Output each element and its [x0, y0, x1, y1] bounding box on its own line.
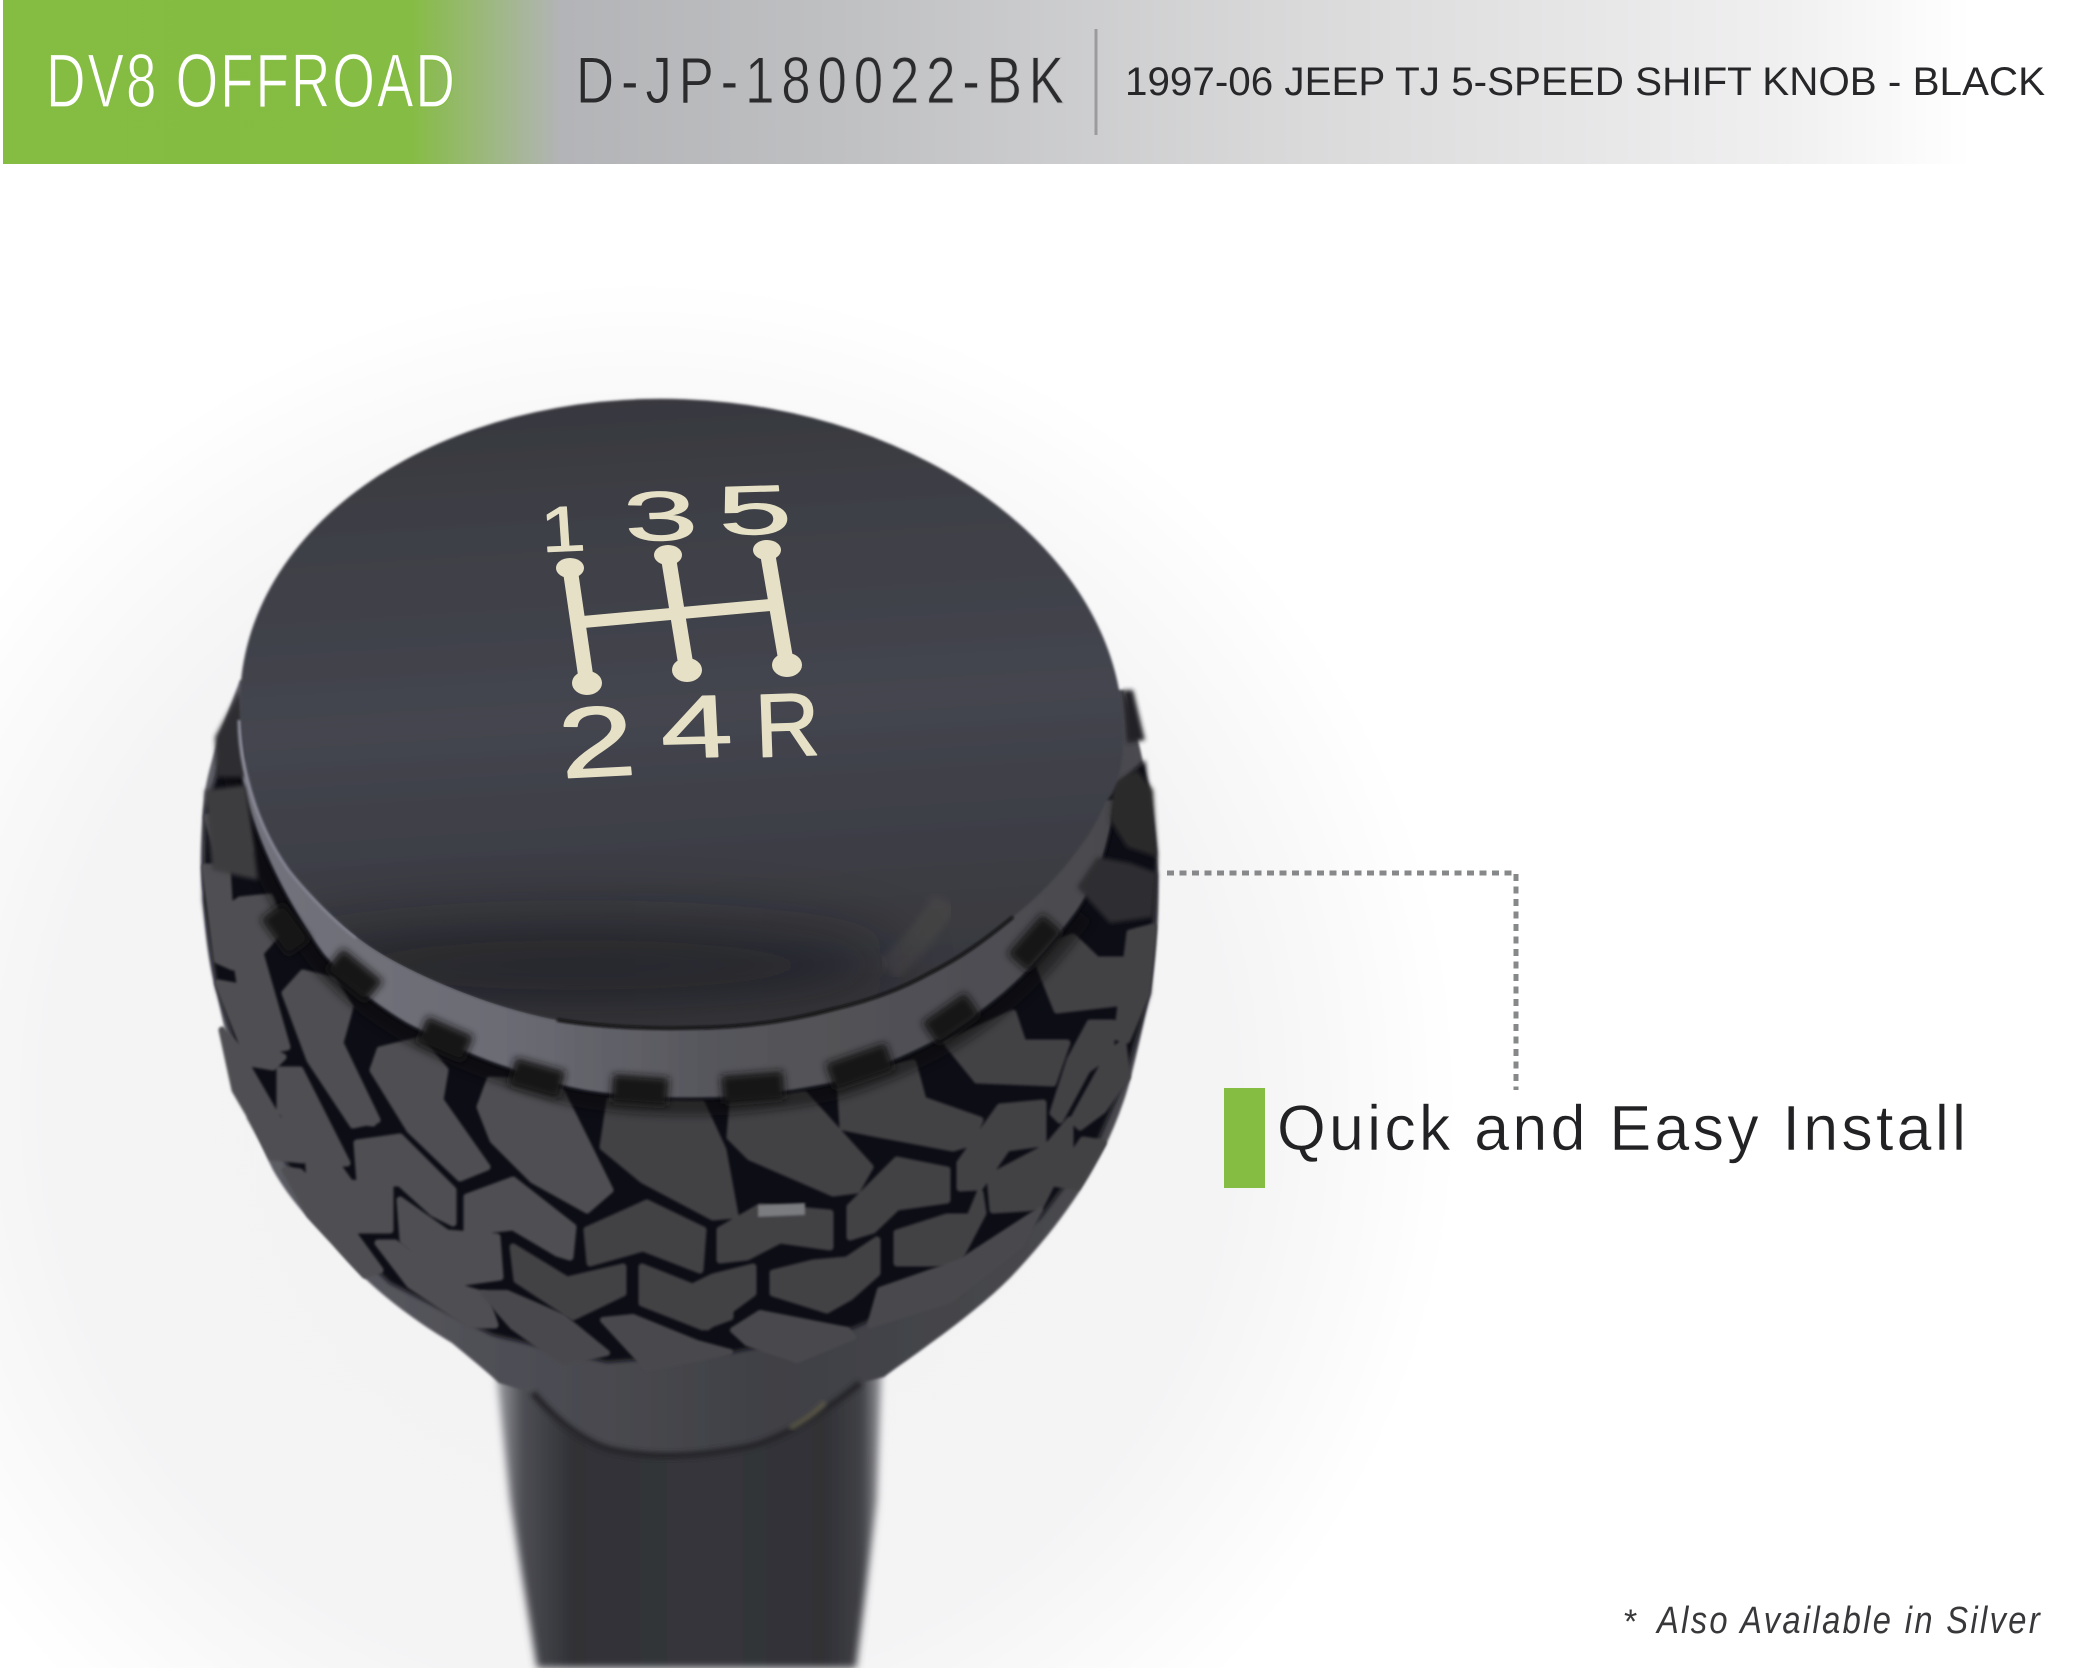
- tread dark base: [203, 720, 1157, 1362]
- footnote text: Also Available in Silver: [1655, 1599, 2041, 1642]
- collar shadow: [533, 1383, 860, 1456]
- tread highlight: [758, 1203, 805, 1217]
- header banner: [3, 0, 2085, 164]
- collar glint: [790, 1402, 825, 1428]
- callout leader dotted line: [1167, 873, 1516, 1090]
- knob body: [201, 680, 1158, 1456]
- gear 2: 2: [553, 685, 640, 800]
- callout green marker: [1224, 1088, 1265, 1188]
- cap dark crescent: [260, 920, 900, 1010]
- gear 3: 3: [620, 477, 701, 556]
- ring body: [240, 760, 1115, 1098]
- ring notches: [272, 911, 1053, 1092]
- cap rim light: [240, 720, 357, 937]
- part number: D-JP-180022-BK: [576, 43, 1064, 117]
- tread shadow under ring: [240, 760, 1077, 1098]
- tread blocks left: [205, 813, 610, 1325]
- header divider: [1094, 29, 1098, 135]
- gear 4: 4: [658, 677, 735, 777]
- product title: 1997-06 JEEP TJ 5-SPEED SHIFT KNOB - BLACK: [1125, 60, 2045, 104]
- shift gate lines: [570, 550, 787, 685]
- header gradient band: [3, 0, 2085, 164]
- left block mid: [205, 785, 258, 880]
- left block top: [215, 690, 248, 777]
- gear numbers: [538, 471, 821, 800]
- bezel ring: [240, 760, 1115, 1098]
- gear 5: 5: [714, 471, 795, 550]
- callout text: Quick and Easy Install: [1277, 1093, 1966, 1164]
- tread blocks lower edge: [483, 1210, 1040, 1368]
- shift gate end dots: [556, 540, 802, 695]
- brand name: DV8 OFFROAD: [46, 39, 455, 124]
- right tip block l: [1123, 690, 1145, 743]
- ring dark outline: [240, 760, 1115, 1098]
- cap bottom edge line: [557, 917, 1013, 1028]
- tread blocks centre and right: [513, 927, 1153, 1327]
- gear 1: 1: [538, 493, 587, 566]
- brushed highlight: [888, 900, 945, 970]
- footnote: [1624, 1599, 2041, 1642]
- callout: quick and easy install: [1224, 1088, 1966, 1188]
- cap disc: [240, 399, 1123, 1028]
- shift crossbar: [583, 605, 770, 622]
- upper tread blocks at right: [1077, 690, 1157, 923]
- footnote asterisk: *: [1624, 1603, 1637, 1641]
- right block k: [1110, 770, 1157, 857]
- reverse R: R: [753, 675, 821, 777]
- background halo behind knob: [0, 165, 1470, 1668]
- right block j: [1077, 857, 1157, 923]
- tire tread pattern: [203, 720, 1157, 1368]
- upper tread blocks at left: [205, 690, 258, 880]
- shift knob illustration: [201, 399, 1158, 1668]
- knob shaft: [495, 1360, 882, 1668]
- gear shift pattern: [556, 540, 802, 695]
- knob cap top: [240, 399, 1123, 1028]
